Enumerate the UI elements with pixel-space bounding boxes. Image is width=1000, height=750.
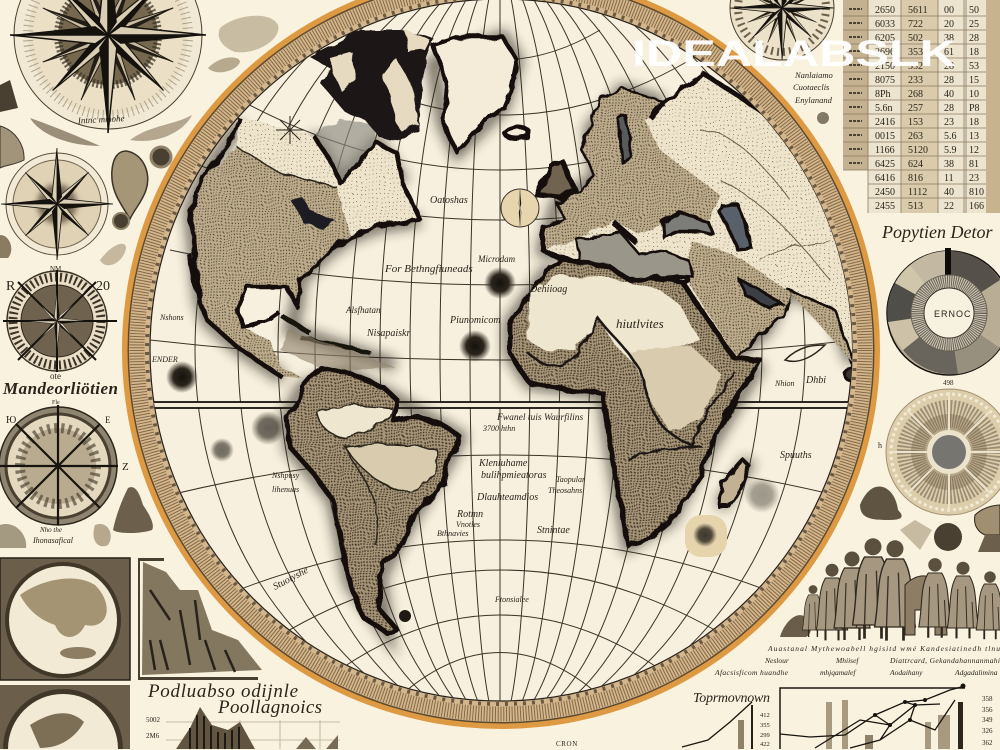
table values: 11 — [944, 173, 954, 184]
table values: 8075 — [875, 75, 895, 86]
table values: 257 — [908, 103, 923, 114]
map labels: Kleníuhame — [478, 458, 528, 469]
table values: 10 — [969, 89, 979, 100]
people caption: Auastanal Mythewoabell hgisitd wmé Kandesiatinedh tlnu — [767, 644, 1000, 653]
table of figures — [843, 0, 1000, 213]
table values: 6033 — [875, 19, 895, 30]
population mountain chart: 2M6 — [146, 732, 160, 740]
map labels: Dlauhteamdios — [476, 492, 538, 503]
table values: 233 — [908, 75, 923, 86]
map labels: ENDER — [151, 355, 178, 364]
table values: 5.6n — [875, 103, 892, 114]
large bar and network chart: 349 — [982, 716, 993, 724]
framed engraved map one — [0, 558, 130, 680]
table values: 810 — [969, 187, 984, 198]
island: Madagascar — [720, 460, 750, 507]
population mountain chart — [146, 707, 578, 749]
table values: 166 — [969, 201, 984, 212]
continent: Asia and Europe — [543, 73, 870, 400]
table values — [875, 5, 984, 212]
Arabia textured land — [690, 240, 790, 355]
map labels: 3700 hthn — [482, 424, 515, 433]
map labels: Oatoshas — [430, 195, 468, 206]
table values: 1112 — [908, 187, 927, 198]
continent: Africa — [510, 260, 760, 545]
map labels — [151, 195, 826, 604]
table values: 25 — [969, 19, 979, 30]
map labels: Spuuths — [780, 450, 812, 461]
map labels: Dhbi — [805, 375, 826, 386]
small line chart: 412 — [760, 712, 770, 719]
table values: 6416 — [875, 173, 895, 184]
small caption beside globe: Cuotaeclis — [793, 82, 830, 92]
compass letters: R — [6, 279, 16, 294]
equator band — [148, 402, 858, 408]
compass rose: fourth left: Z — [122, 461, 129, 473]
donut centre label: ERNOC — [934, 309, 972, 319]
map labels: lihenuas — [272, 485, 299, 494]
large bar and network chart: 356 — [982, 706, 993, 714]
map labels: Bthnavies — [437, 529, 469, 538]
table values: 23 — [944, 117, 954, 128]
compass rose: fourth left: E — [105, 415, 111, 425]
Europe textured land — [545, 90, 720, 248]
continent: South America — [287, 367, 460, 633]
table values: 268 — [908, 89, 923, 100]
people caption: Aodaihany — [889, 668, 923, 677]
Caribbean islands — [283, 317, 370, 353]
Baja coast — [190, 255, 198, 296]
small line chart — [682, 702, 770, 749]
table values: 18 — [969, 47, 979, 58]
Persian Gulf — [740, 280, 783, 308]
Black Sea — [663, 212, 712, 238]
small caption beside globe — [793, 70, 833, 105]
table values: 2455 — [875, 201, 895, 212]
people caption: Neslour — [764, 656, 789, 665]
table values: 722 — [908, 19, 923, 30]
table values: 5611 — [908, 5, 928, 16]
circular mandala diagram: h — [878, 441, 882, 450]
table values: 00 — [944, 5, 954, 16]
compass ring lettering: Intnc mmohe — [77, 113, 125, 126]
compass rose: third left: 20 — [96, 279, 110, 294]
heading: population data: Popytien Detor — [881, 222, 993, 242]
continent: Greenland — [433, 37, 517, 152]
small coastline vignettes around the compass — [0, 16, 278, 265]
donut chart — [887, 248, 1000, 375]
table values: 23 — [969, 173, 979, 184]
map labels: Theosahns — [548, 486, 582, 495]
table values: 2696 — [875, 47, 895, 58]
table values: 22 — [944, 201, 954, 212]
network nodes — [873, 684, 966, 727]
table values: 0015 — [875, 131, 895, 142]
small figure and caption below the compass: Ihonasafical — [32, 536, 74, 545]
Great Lakes — [290, 197, 337, 228]
table values: 2150 — [875, 61, 895, 72]
table values: 502 — [908, 33, 923, 44]
table values: 6425 — [875, 159, 895, 170]
right chart heading: Toprmovnown — [693, 691, 770, 706]
compass rose: fourth left: Fle — [52, 400, 60, 406]
people caption: Diattrcard, Gekandahannanmahi — [889, 656, 1000, 665]
map labels: Nshpusy — [271, 471, 300, 480]
small line chart: 355 — [760, 722, 770, 729]
coastal shadows — [190, 37, 853, 633]
table values: 50 — [969, 5, 979, 16]
left chart heading: Poollagnoics — [217, 697, 322, 718]
globe rim: orange ring and hatched band — [122, 0, 880, 729]
thin star vignette on Canada — [276, 116, 304, 144]
table values: 18 — [969, 117, 979, 128]
compass rose: large top left — [10, 0, 206, 133]
framed engraved map two — [0, 685, 130, 750]
table values: 8Ph — [875, 89, 891, 100]
population mountain chart: CRON — [556, 740, 578, 748]
map labels: Vnotles — [456, 520, 480, 529]
island: British Isles — [537, 162, 575, 197]
continent: North America — [190, 118, 420, 378]
table values: 40 — [944, 89, 954, 100]
compass rose: third left: ote — [50, 371, 61, 381]
large bar and network chart: 358 — [982, 695, 993, 703]
circular mandala diagram: 498 — [943, 379, 954, 387]
map labels: For Bethngfiuneads — [384, 263, 473, 275]
table values: 28 — [944, 75, 954, 86]
large bar and network chart: 326 — [982, 727, 993, 735]
population mountain chart: 5002 — [146, 716, 160, 724]
left chart heading: Podluabso odijnle — [147, 681, 298, 702]
large bar and network chart: 362 — [982, 739, 993, 747]
icon: engraved teardrop medallion — [112, 147, 171, 229]
table values: 28 — [969, 33, 979, 44]
table values: 61 — [944, 47, 954, 58]
table values: 38 — [944, 159, 954, 170]
table values: 1166 — [875, 145, 895, 156]
table values: 2450 — [875, 187, 895, 198]
table values: 2416 — [875, 117, 895, 128]
map labels: Ftonsialee — [494, 595, 529, 604]
table values: 15 — [969, 75, 979, 86]
table values: 153 — [908, 117, 923, 128]
table values: 38 — [944, 33, 954, 44]
illustration: group of people — [780, 538, 1000, 641]
circular mandala diagram — [878, 379, 1000, 515]
people caption: Adgadalimina — [954, 668, 998, 677]
map labels: Alsfhatan — [345, 305, 381, 315]
table values: 6205 — [875, 33, 895, 44]
table values: 81 — [969, 159, 979, 170]
people caption — [714, 644, 1000, 677]
framed engraved trees — [138, 558, 262, 680]
table values: 5.6 — [944, 131, 956, 142]
table values: 263 — [908, 131, 923, 142]
Mediterranean Sea — [577, 232, 693, 280]
map labels: Fwanel tuis Waurfilins — [496, 412, 584, 423]
people caption: Afacsisficom huandhe — [714, 668, 789, 677]
map labels: Nshons — [159, 313, 184, 322]
arctic islands — [310, 30, 433, 140]
people caption: Mhiisef — [835, 656, 859, 665]
small caption beside globe: Enylanand — [794, 95, 833, 105]
map labels: Taopular — [556, 475, 586, 484]
compass rose: fourth left: Ю — [6, 415, 16, 426]
map labels: Nhion — [774, 379, 795, 388]
table values: 28 — [944, 61, 954, 72]
Baltic Sea — [618, 116, 632, 162]
compass rose: top right — [730, 0, 834, 60]
island: Iceland — [505, 127, 529, 139]
table values: 12 — [969, 145, 979, 156]
table values: 624 — [908, 159, 923, 170]
small caption beside globe: Nanlaiamo — [794, 70, 833, 80]
table values: 5120 — [908, 145, 928, 156]
table values: 353 — [908, 47, 923, 58]
table values: 513 — [908, 201, 923, 212]
small figure and caption below the compass — [0, 487, 153, 548]
map labels: Stuotyshe — [271, 565, 311, 593]
table values: 816 — [908, 173, 923, 184]
table row label marks — [849, 9, 862, 163]
table values: 20 — [944, 19, 954, 30]
large bar and network chart — [780, 684, 993, 749]
map labels: Stnintae — [537, 525, 570, 536]
illustration: globe and urn — [860, 486, 1000, 552]
brand watermark: IDEALABSLK — [632, 33, 956, 74]
Hudson Bay — [314, 118, 376, 178]
graticule lines — [150, 0, 855, 730]
map labels: Piunomicom — [449, 315, 501, 326]
compass rose: third left — [3, 265, 117, 381]
map labels: hiutlvites — [616, 316, 664, 331]
sea medallions — [166, 189, 825, 622]
heading: left compass section: Mandeorliötien — [2, 379, 118, 398]
table values: 2650 — [875, 5, 895, 16]
table values: 5.9 — [944, 145, 956, 156]
compass rose: third left: NM — [50, 265, 62, 273]
map labels: Dehiioag — [529, 284, 567, 295]
table values: 13 — [969, 131, 979, 142]
map labels: Rotmn — [456, 509, 483, 520]
left chart heading — [147, 681, 322, 718]
small line chart: 299 — [760, 732, 770, 739]
small line chart: 422 — [760, 741, 770, 748]
small figure and caption below the compass: Nho the — [39, 526, 62, 534]
compass rose: fourth left — [0, 400, 129, 525]
main globe map — [122, 0, 880, 730]
table values: 40 — [944, 187, 954, 198]
Caspian Sea — [720, 205, 752, 250]
table values: 28 — [944, 103, 954, 114]
table values: P8 — [969, 103, 980, 114]
map labels: bulihpmieatoras — [481, 470, 547, 481]
map labels: Nisapaiskr — [366, 328, 410, 339]
small ornament under caption — [817, 112, 829, 124]
compass rose: second left — [1, 148, 113, 260]
table values: 53 — [969, 61, 979, 72]
map labels: Microdam — [477, 254, 516, 264]
table values: 552 — [908, 61, 923, 72]
people caption: mhjqamalef — [820, 668, 856, 677]
